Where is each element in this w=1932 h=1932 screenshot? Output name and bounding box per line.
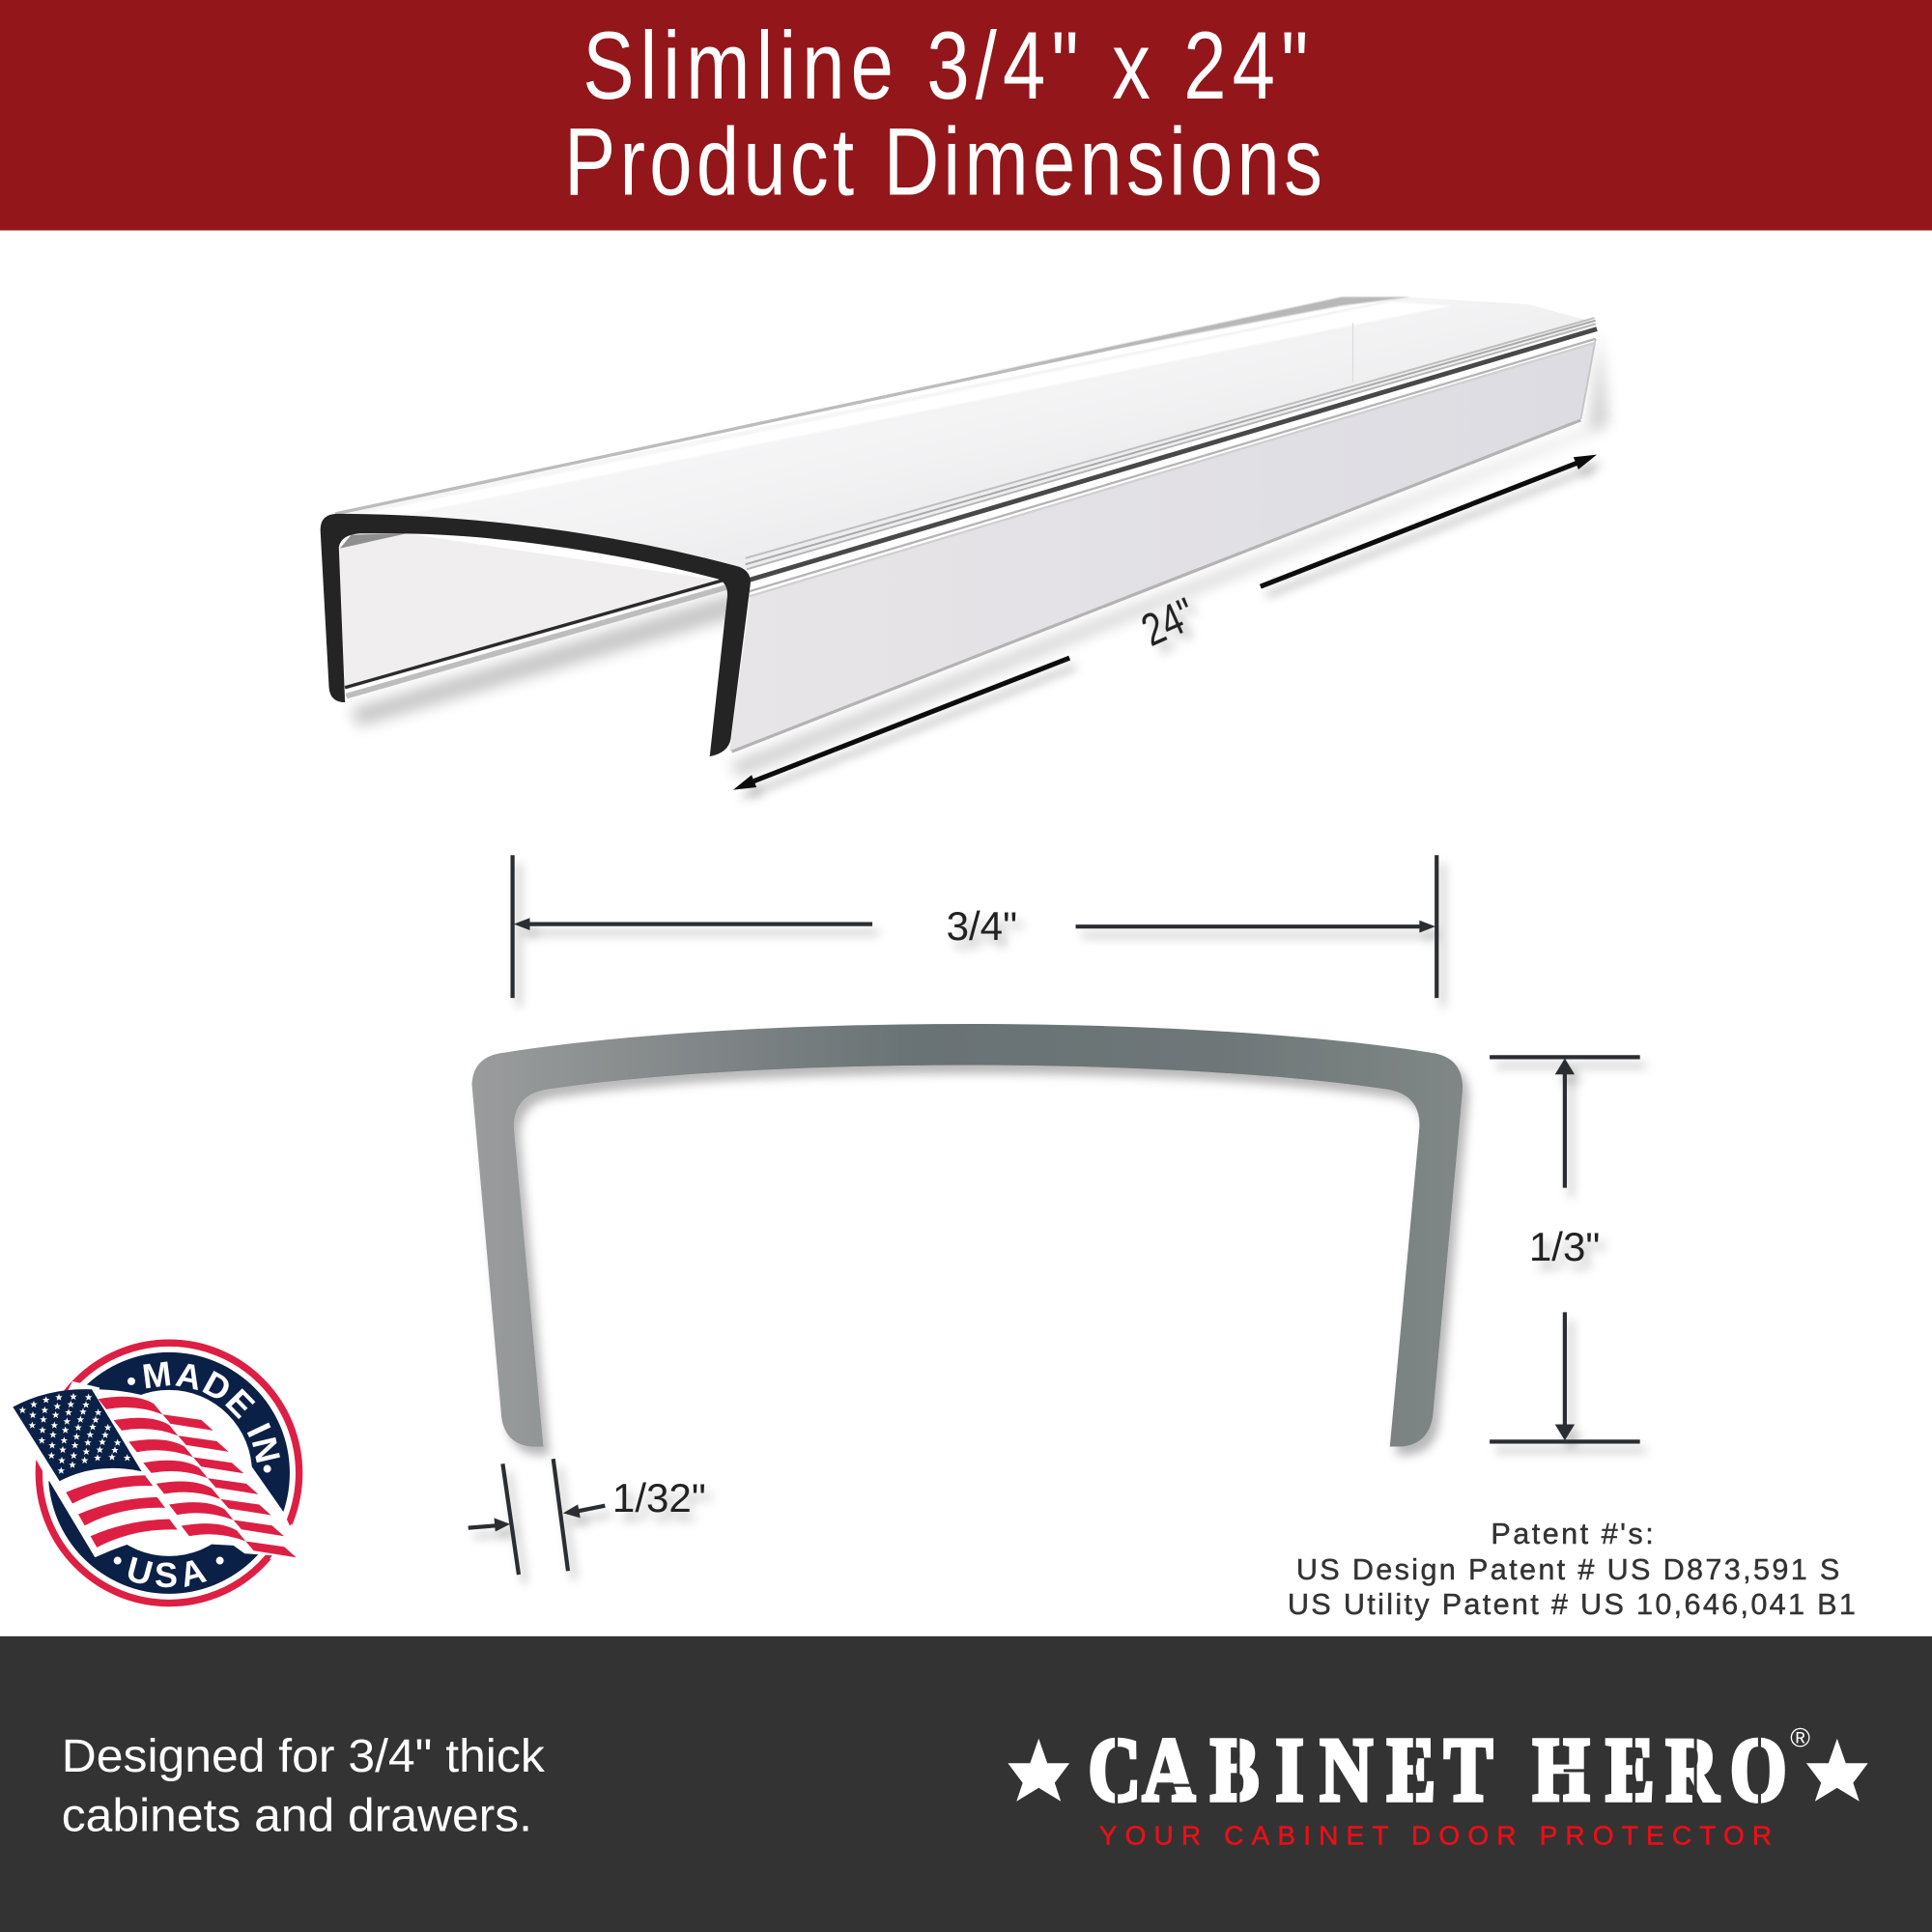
registered mark: ® <box>1790 1723 1810 1753</box>
label: 1/3 inch: 1/3" <box>1529 1224 1600 1269</box>
gray U profile cross-section <box>472 1024 1463 1446</box>
patent numbers <box>1288 1518 1856 1621</box>
flag canton with stars <box>13 1389 142 1481</box>
icon: right star <box>1806 1739 1868 1802</box>
badge arc text: USA: USA <box>128 1557 207 1588</box>
side panel <box>729 341 1596 752</box>
logo slogan: YOUR CABINET DOOR PROTECTOR <box>1099 1820 1772 1850</box>
label: 3/4 inch: 3/4" <box>947 903 1017 949</box>
footer tagline line 2: cabinets and drawers. <box>62 1789 532 1841</box>
header banner <box>0 0 1932 231</box>
title line 2: Product Dimensions <box>564 108 1322 216</box>
flag <box>13 1389 304 1558</box>
arrow: 24 inch length <box>733 455 1597 790</box>
badge arc text: made in: MADE IN <box>143 1362 280 1463</box>
top surface <box>335 297 1597 569</box>
footer tagline line 1: Designed for 3/4" thick <box>62 1730 546 1782</box>
design patent: US Design Patent # US D873,591 S <box>1296 1553 1839 1586</box>
utility patent: US Utility Patent # US 10,646,041 B1 <box>1288 1588 1856 1621</box>
dimension: 3/4 inch width lines <box>513 855 1436 998</box>
label: 24 inch: 24" <box>1134 588 1203 656</box>
dimension: 1/3 inch height lines <box>1490 1057 1640 1441</box>
title line 1: Slimline 3/4" x 24" <box>582 13 1308 120</box>
label: 1/32 inch: 1/32" <box>612 1475 706 1520</box>
dimension: 1/32 inch thickness lines <box>469 1459 605 1575</box>
ridges <box>746 318 1595 558</box>
inner wall <box>339 533 727 690</box>
patent numbers: Patent #'s: <box>1491 1518 1654 1550</box>
wordmark: CABINET HERO <box>1089 1720 1787 1821</box>
Cabinet Hero logo <box>1008 1720 1868 1850</box>
made in USA badge <box>13 1339 303 1607</box>
product 3D render: clear U channel <box>321 297 1608 777</box>
footer band <box>0 1636 1932 1932</box>
black cross-section <box>321 514 751 756</box>
icon: left star <box>1008 1739 1069 1802</box>
stencil cuts through the wordmark <box>1117 1735 1759 1806</box>
